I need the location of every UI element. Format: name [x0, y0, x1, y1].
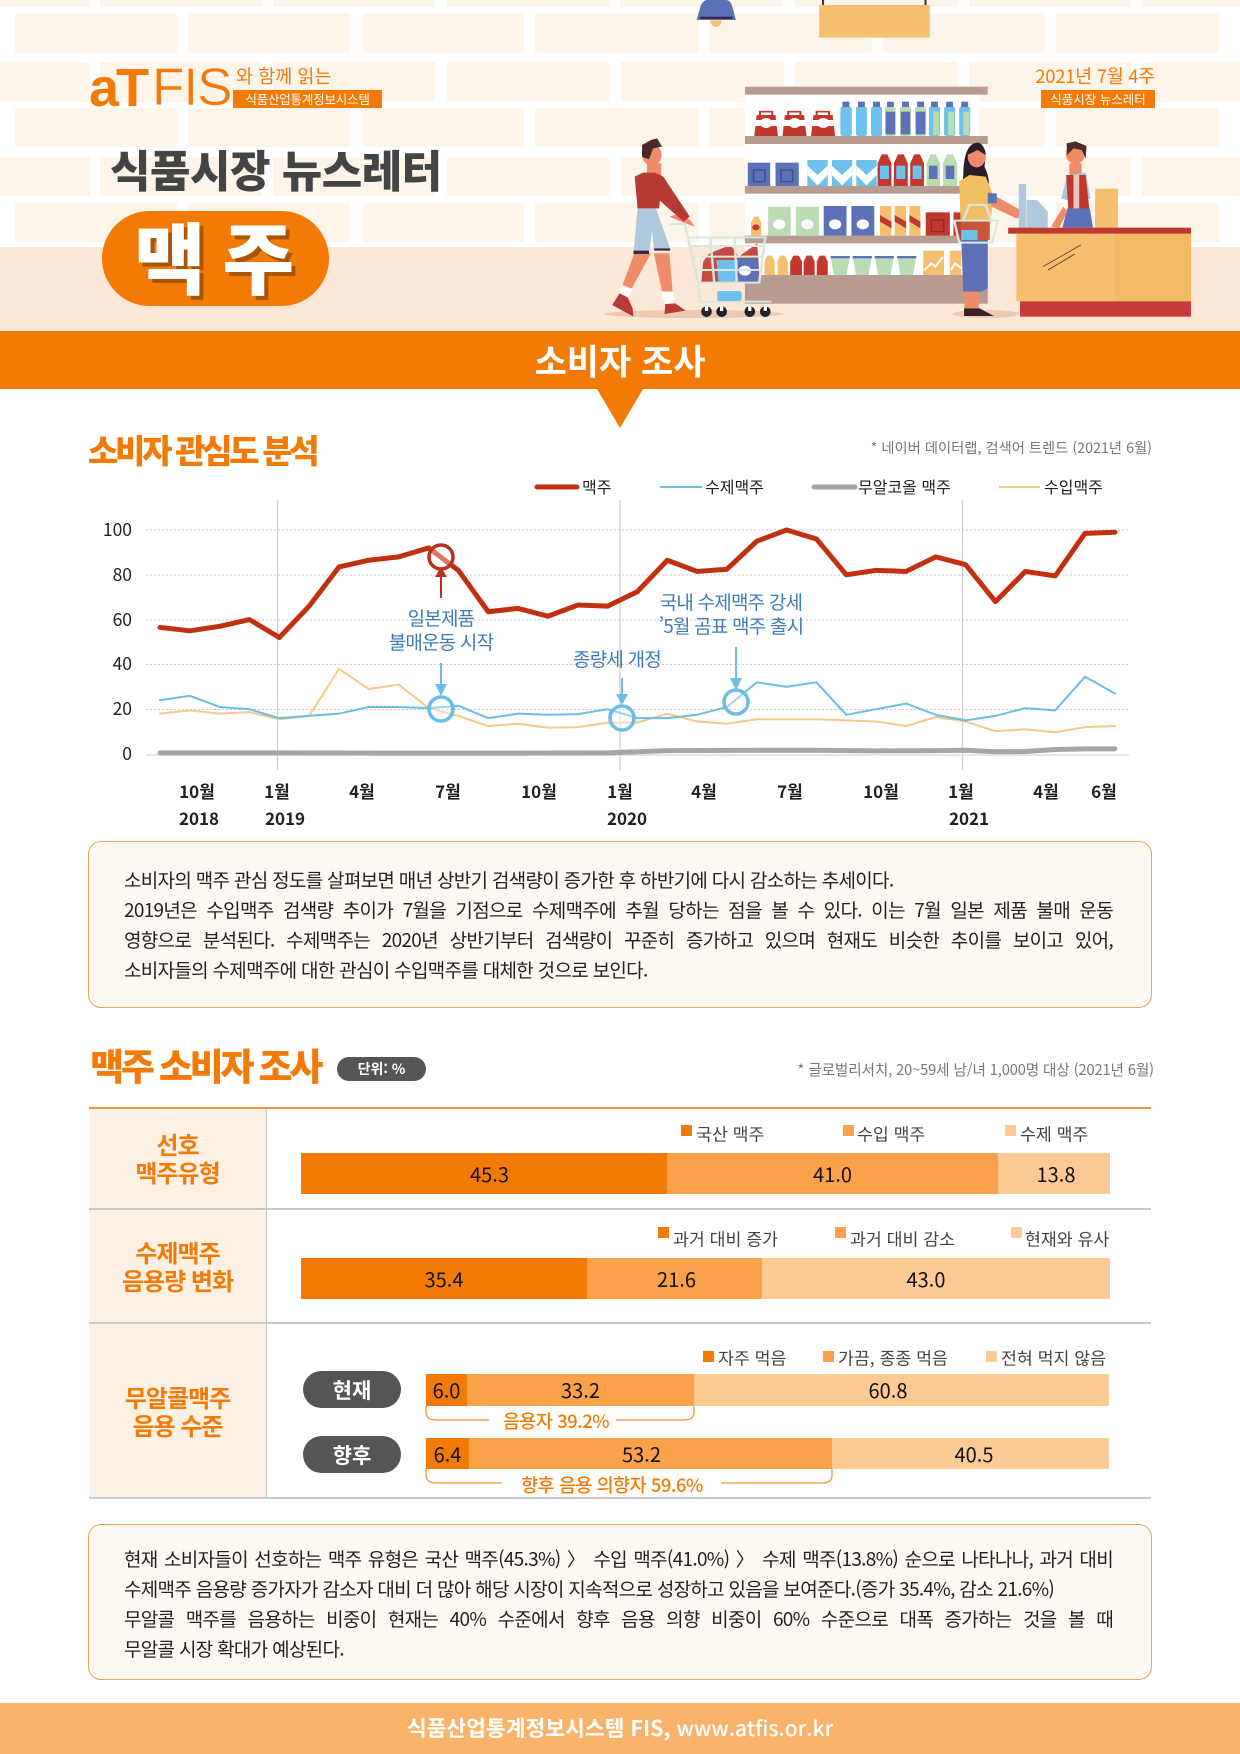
summary text 2: 무알콜 시장 확대가 예상된다. — [124, 1635, 344, 1662]
pill: current — [303, 1371, 401, 1408]
legend: 수제맥주 — [705, 474, 764, 498]
y axis labels: 20 — [113, 696, 132, 721]
survey table frame — [89, 1107, 1151, 1499]
summary text 2: 수제맥주 음용량 증가자가 감소자 대비 더 많아 해당 시장이 지속적으로 성장하고 있음을 보여준다.(증가 35.4%, 감소 21.6%) — [124, 1575, 1054, 1602]
icon: paper bag — [1095, 189, 1118, 228]
logo: aT FIS: FIS — [152, 58, 231, 117]
row 1: preferred beer type: 41.0 — [813, 1158, 852, 1188]
summary text 2: 현재 소비자들이 선호하는 맥주 유형은 국산 맥주(45.3%) 〉 수입 맥주(41.0%) 〉 수제 맥주(13.8%) 순으로 나타나나, 과거 대비 — [124, 1545, 1113, 1572]
row 1: preferred beer type: 수제 맥주 — [1020, 1120, 1088, 1145]
y axis labels: 40 — [113, 651, 132, 676]
row 2: craft beer consumption change: 과거 대비 증가 — [673, 1225, 778, 1250]
character: clerk — [1051, 141, 1093, 228]
row label: non-alcoholic beer consumption: 무알콜맥주 — [125, 1379, 230, 1414]
x axis labels: 2018 — [179, 805, 219, 830]
y axis labels: 80 — [113, 562, 132, 587]
x axis labels: 1월 — [948, 778, 974, 803]
row 1: preferred beer type — [301, 1120, 1110, 1194]
icon: cash register — [1019, 184, 1048, 228]
illustration: supermarket scene — [604, 0, 1192, 318]
legend: 맥주 — [582, 474, 611, 498]
pill: future — [303, 1436, 401, 1473]
logo: aT FIS — [89, 58, 231, 118]
section banner: 소비자 조사 — [535, 334, 705, 386]
shelf unit — [745, 87, 988, 304]
callout labels — [389, 588, 803, 672]
y axis labels — [103, 517, 132, 766]
heading: beer consumer survey: 맥주 소비자 조사 — [90, 1037, 320, 1091]
row 1: preferred beer type: 13.8 — [1037, 1158, 1075, 1188]
shelf products row 2 — [748, 154, 957, 186]
bar: current: 6.0 — [433, 1375, 460, 1404]
unit pill — [337, 1057, 426, 1081]
logo tagline — [233, 63, 382, 108]
x axis labels: 7월 — [777, 778, 803, 803]
summary text 1: 영향으로 분석된다. 수제맥주는 2020년 상반기부터 검색량이 꾸준히 증가하고 있으며 현재도 비슷한 추이를 보이고 있어, — [124, 926, 1113, 953]
callout labels: ’5월 곰표 맥주 출시 — [659, 612, 803, 639]
x axis labels: 10월 — [179, 778, 215, 803]
logo tagline: 와 함께 읽는 — [236, 63, 331, 89]
row label: preferred type: 선호 — [156, 1126, 199, 1161]
summary text 1 — [124, 866, 1113, 983]
summary box 2 — [88, 1524, 1152, 1680]
row 2: craft beer consumption change: 21.6 — [657, 1264, 696, 1292]
legend: 무알코올 맥주 — [858, 474, 951, 498]
checkout counter — [1008, 228, 1191, 317]
x axis labels: 2021 — [949, 805, 989, 830]
x axis labels: 4월 — [1033, 778, 1059, 803]
summary text 1: 소비자들의 수제맥주에 대한 관심이 수입맥주를 대체한 것으로 보인다. — [124, 956, 648, 983]
row 1: preferred beer type: 수입 맥주 — [857, 1120, 925, 1145]
title: 식품시장 뉴스레터 — [110, 136, 442, 200]
summary text 2 — [124, 1545, 1113, 1662]
icon: hanging sign — [819, 0, 930, 38]
summary box 1 — [88, 841, 1152, 1008]
callout labels: 일본제품 — [408, 604, 475, 631]
bar: future: 6.4 — [434, 1438, 461, 1468]
row 2: craft beer consumption change: 35.4 — [425, 1264, 463, 1292]
legend — [537, 474, 1103, 498]
bar: future: 40.5 — [955, 1438, 993, 1468]
issue date: 식품시장 뉴스레터 — [1050, 89, 1146, 108]
source note: * 네이버 데이터랩, 검색어 트렌드 (2021년 6월) — [871, 437, 1152, 458]
x axis labels: 2020 — [607, 805, 647, 830]
bracket: current drinkers — [425, 1406, 695, 1421]
bar: current: 60.8 — [869, 1375, 907, 1404]
row 2: craft beer consumption change — [301, 1225, 1110, 1299]
background: brick wall and floor — [0, 0, 1240, 331]
x axis labels: 1월 — [607, 778, 633, 803]
label: future drinkers: 향후 음용 의향자 59.6% — [521, 1472, 703, 1498]
footer: 식품산업통계정보시스템 FIS, www.atfis.or.kr — [407, 1712, 833, 1743]
row 3: non-alcoholic beer legend: 자주 먹음 — [718, 1344, 786, 1369]
row label: preferred type — [135, 1126, 220, 1188]
unit pill: 단위: % — [358, 1059, 405, 1079]
icon: ceiling lamp — [697, 0, 736, 27]
x axis labels: 2019 — [265, 805, 305, 830]
x axis labels — [179, 778, 1117, 830]
section banner — [0, 331, 1240, 428]
x axis labels: 10월 — [863, 778, 899, 803]
character: woman with basket — [954, 143, 1024, 316]
summary text 2: 무알콜 맥주를 음용하는 비중이 현재는 40% 수준에서 향후 음용 의향 비중이 60% 수준으로 대폭 증가하는 것을 볼 때 — [124, 1605, 1113, 1632]
survey source note: * 글로벌리서치, 20~59세 남/녀 1,000명 대상 (2021년 6월) — [798, 1059, 1154, 1080]
x axis labels: 7월 — [435, 778, 461, 803]
row label: craft beer consumption change — [122, 1234, 234, 1296]
callout labels: 불매운동 시작 — [389, 628, 494, 655]
x axis labels: 4월 — [349, 778, 375, 803]
x axis labels: 10월 — [521, 778, 557, 803]
row 2: craft beer consumption change: 43.0 — [907, 1264, 945, 1292]
row 3: non-alcoholic beer legend: 가끔, 종종 먹음 — [838, 1344, 948, 1369]
data lines — [160, 530, 1115, 753]
icon: shopping cart — [669, 224, 771, 317]
row 3: non-alcoholic beer legend — [703, 1344, 1106, 1369]
topic pill: beer — [102, 211, 329, 306]
character: man pushing cart — [612, 138, 695, 317]
row 2: craft beer consumption change: 과거 대비 감소 — [850, 1225, 955, 1250]
callout labels: 국내 수제맥주 강세 — [660, 588, 802, 615]
bar: current — [426, 1374, 1109, 1406]
bar: future — [426, 1438, 1109, 1469]
x axis labels: 4월 — [691, 778, 717, 803]
callout labels: 종량세 개정 — [573, 645, 661, 672]
heading: interest analysis: 소비자 관심도 분석 — [88, 425, 316, 473]
legend: 수입맥주 — [1044, 474, 1103, 498]
bar: current: 33.2 — [561, 1375, 600, 1404]
x axis labels: 6월 — [1091, 778, 1117, 803]
summary text 1: 2019년은 수입맥주 검색량 추이가 7월을 기점으로 수제맥주에 추월 당하는 점을 볼 수 있다. 이는 7월 일본 제품 불매 운동 — [124, 896, 1113, 923]
summary text 1: 소비자의 맥주 관심 정도를 살펴보면 매년 상반기 검색량이 증가한 후 하반기에 다시 감소하는 추세이다. — [124, 866, 893, 893]
row 2: craft beer consumption change: 현재와 유사 — [1025, 1225, 1109, 1250]
y axis labels: 60 — [113, 607, 132, 632]
y axis labels: 0 — [122, 741, 132, 766]
row label: preferred type: 맥주유형 — [135, 1154, 220, 1188]
logo tagline: 식품산업통계정보시스템 — [245, 89, 370, 108]
issue date — [1035, 63, 1155, 108]
pill: current: 현재 — [333, 1374, 371, 1404]
line chart — [103, 474, 1129, 830]
issue date: 2021년 7월 4주 — [1035, 63, 1155, 89]
shelf products row 4 — [764, 251, 961, 275]
label: current drinkers: 음용자 39.2% — [503, 1408, 609, 1434]
row label: non-alcoholic beer consumption: 음용 수준 — [132, 1406, 223, 1442]
row label: craft beer consumption change: 수제맥주 — [135, 1234, 220, 1269]
floor shadows — [604, 310, 1019, 318]
row label: non-alcoholic beer consumption — [125, 1379, 230, 1442]
y axis labels: 100 — [103, 517, 132, 542]
row label: craft beer consumption change: 음용량 변화 — [122, 1262, 233, 1296]
logo: aT FIS: aT — [89, 58, 146, 118]
bar: future: 53.2 — [622, 1438, 661, 1468]
shelf products row 3 — [751, 206, 963, 236]
row 1: preferred beer type: 국산 맥주 — [696, 1120, 764, 1145]
topic pill: beer: 맥 주 — [134, 199, 290, 311]
pill: future: 향후 — [333, 1440, 371, 1470]
footer — [0, 1703, 1240, 1754]
callout circles and arrows — [429, 545, 748, 730]
row 1: preferred beer type: 45.3 — [470, 1158, 509, 1188]
x axis labels: 1월 — [264, 778, 290, 803]
shelf products row 1 — [754, 102, 970, 136]
row 3: non-alcoholic beer legend: 전혀 먹지 않음 — [1001, 1344, 1106, 1369]
bracket: future drinkers — [425, 1469, 833, 1484]
